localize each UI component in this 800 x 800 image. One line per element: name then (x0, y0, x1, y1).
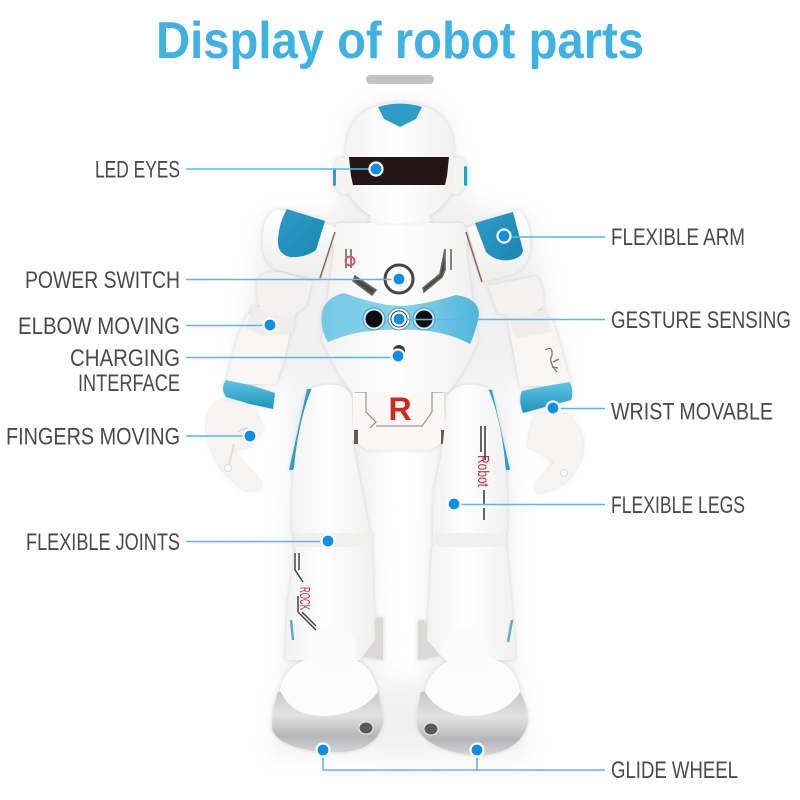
left shoulder (263, 209, 335, 280)
right ankle bracket (418, 620, 440, 660)
label: flexible arm: FLEXIBLE ARM (611, 224, 745, 251)
label: glide wheel: GLIDE WHEEL (611, 757, 738, 784)
right shoulder (466, 210, 530, 282)
soft shadow behind robot (230, 100, 570, 760)
left blue leg strip (289, 389, 318, 470)
right foot (417, 627, 528, 755)
grey divider pill (366, 75, 434, 84)
right blue leg strip (481, 389, 510, 470)
title: Display of robot parts (156, 12, 644, 70)
silver base (272, 690, 383, 752)
right hand (528, 413, 583, 493)
label: LED eyes: LED EYES (95, 156, 180, 184)
torso (322, 223, 479, 392)
callout: flexible arm (498, 230, 605, 242)
scorpion mark (545, 348, 559, 372)
left knee joint (294, 533, 372, 548)
shin marks (295, 553, 316, 630)
callout: power switch (186, 272, 406, 286)
label: charging interface: CHARGING (70, 345, 180, 372)
left foot (272, 625, 383, 752)
blue chest band (322, 293, 479, 344)
label: flexible legs: FLEXIBLE LEGS (611, 492, 745, 519)
neck (370, 190, 430, 226)
left arm (226, 272, 312, 384)
left shin (285, 547, 375, 660)
logo R: R (388, 391, 412, 427)
left hand (207, 400, 263, 490)
forehead blue (378, 104, 422, 127)
right wrist cuff (520, 382, 572, 413)
power switch (385, 265, 413, 293)
callout: flexible joints (186, 534, 334, 548)
shin word: ROCK (296, 587, 313, 610)
callout: elbow moving (186, 318, 276, 332)
label: charging interface: INTERFACE (78, 370, 180, 397)
label: flexible joints: FLEXIBLE JOINTS (26, 529, 180, 556)
leg word: Robot (474, 455, 491, 487)
callout: glide wheel (316, 744, 605, 770)
target mark (346, 256, 354, 266)
left wrist cuff (223, 380, 275, 409)
callout: charging interface (186, 350, 404, 362)
right knee joint (433, 533, 506, 548)
callout: wrist movable (546, 402, 605, 414)
label: charging interface (70, 345, 180, 397)
label: fingers moving: FINGERS MOVING (6, 424, 180, 450)
chest marks (346, 249, 451, 295)
callout: fingers moving (186, 430, 256, 442)
label: elbow moving: ELBOW MOVING (18, 313, 180, 340)
leg marks (481, 426, 485, 520)
left ankle bracket (362, 617, 383, 660)
label: power switch: POWER SWITCH (25, 267, 180, 294)
right shin (427, 547, 515, 660)
callout: LED eyes (186, 162, 382, 176)
head (333, 103, 467, 223)
pelvis (352, 380, 446, 450)
charging port (393, 345, 405, 357)
robot (207, 103, 583, 755)
visor (349, 157, 449, 185)
gesture sensors (363, 308, 435, 330)
right arm (488, 276, 572, 386)
callout: gesture sensing (392, 312, 605, 326)
right thigh (433, 385, 507, 533)
left thigh (292, 385, 370, 533)
ears (333, 158, 352, 194)
callout: flexible legs (448, 498, 605, 510)
